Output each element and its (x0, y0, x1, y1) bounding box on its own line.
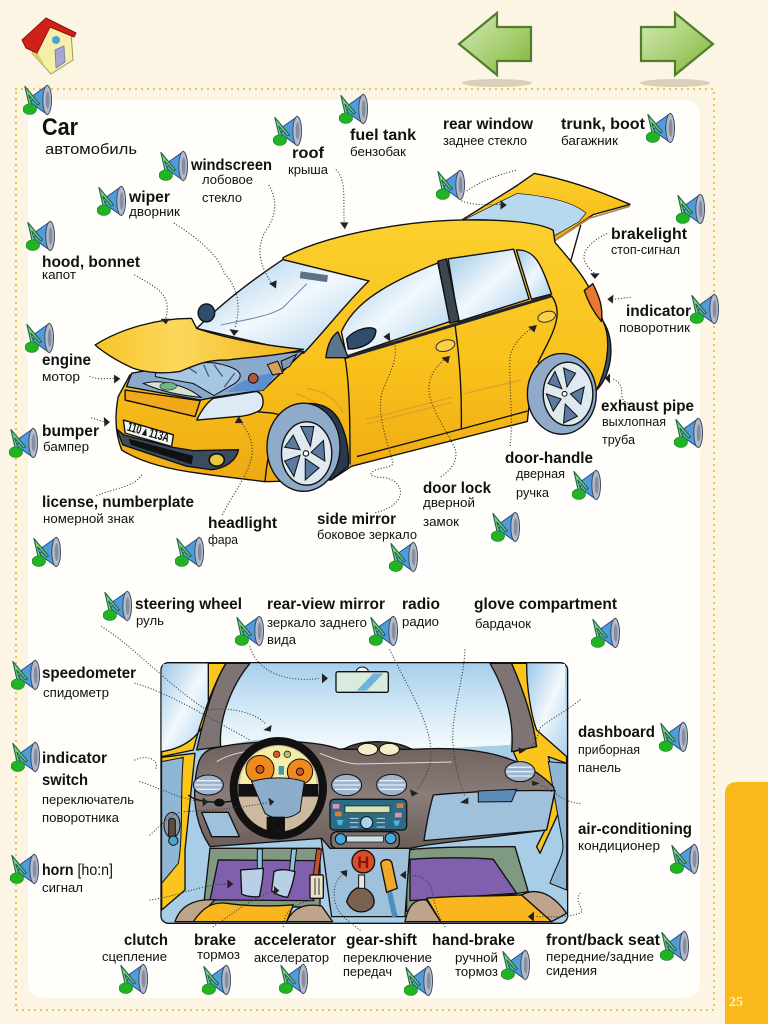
label: indicator switch: переключатель (42, 793, 134, 807)
label: glove compartment: бардачок (475, 617, 532, 631)
label: brake: тормоз (197, 948, 240, 962)
label: gear-shift: gear-shift (346, 932, 418, 949)
seats (175, 892, 567, 922)
label: engine: мотор (42, 370, 80, 384)
label: trunk boot: багажник (561, 134, 619, 148)
small panel (202, 812, 239, 837)
label: wiper: дворник (129, 205, 181, 219)
label: exhaust pipe: труба (602, 433, 635, 447)
dashboard trim line (217, 750, 452, 764)
label: fuel tank: бензобак (350, 145, 407, 159)
car body (116, 220, 608, 482)
instrument binnacle (344, 742, 412, 755)
label: rear window (443, 116, 534, 148)
label: rear-view mirror: зеркало заднего (267, 616, 367, 630)
label: hood bonnet: hood, bonnet (42, 254, 141, 271)
leader: air conditioning (532, 781, 580, 803)
leader: gear shift (334, 870, 360, 930)
leader: indicator (607, 295, 630, 304)
label: indicator: поворотник (619, 321, 691, 335)
leader: brakelight (584, 234, 607, 279)
label: dashboard: dashboard (578, 724, 655, 741)
label: accelerator: accelerator (254, 932, 336, 949)
leader: speedometer (135, 683, 250, 740)
leader: hood (135, 275, 170, 324)
label: license numberplate (42, 494, 194, 526)
label: gear-shift: переключение (343, 951, 432, 965)
label: engine (42, 352, 91, 384)
intake grille (129, 439, 193, 464)
floor left (203, 848, 320, 908)
side door handle (164, 812, 180, 845)
home icon (22, 18, 76, 74)
label: brakelight: стоп-сигнал (611, 243, 680, 257)
label: accelerator (254, 932, 336, 965)
dashboard (195, 742, 555, 848)
windscreen view (220, 663, 511, 750)
label: radio: радио (402, 615, 439, 629)
label: rear-view mirror: rear-view mirror (267, 596, 385, 613)
label: trunk boot (561, 116, 646, 148)
open tailgate (462, 173, 630, 268)
label: hand-brake: тормоз (455, 965, 498, 979)
label: door lock: дверной (423, 496, 475, 510)
tail light (584, 284, 602, 322)
label: door-handle: дверная (516, 467, 565, 481)
leader: wiper (174, 223, 239, 336)
label: air-conditioning (578, 821, 692, 853)
label: bumper: bumper (42, 423, 99, 440)
label: brakelight: brakelight (611, 226, 688, 243)
label: windscreen: windscreen (190, 157, 272, 174)
label: clutch (102, 932, 168, 964)
leader: dashboard (518, 700, 580, 754)
door handles (435, 309, 557, 353)
label: radio: radio (402, 596, 440, 613)
interior frame (161, 663, 568, 923)
left side window (162, 664, 208, 752)
label: speedometer: спидометр (43, 686, 109, 700)
leader: glove compartment (453, 650, 468, 804)
label: fuel tank (350, 127, 416, 159)
label: steering wheel (135, 596, 242, 628)
air vents (193, 762, 535, 796)
label: wiper: wiper (128, 189, 170, 206)
label: rear-view mirror (267, 596, 385, 647)
front wheel (267, 403, 340, 491)
label: roof: крыша (288, 163, 328, 177)
radio unit (330, 799, 407, 830)
footwell carpet right (410, 858, 517, 901)
door seams (345, 296, 557, 464)
label: exhaust pipe: exhaust pipe (601, 398, 694, 415)
right side window (528, 664, 567, 757)
leader: side mirror (371, 333, 400, 513)
leader: front back seat (528, 893, 582, 922)
engine bay (127, 351, 304, 400)
leader: hand brake (400, 871, 445, 927)
rear wheel (527, 354, 596, 434)
door pillar (438, 259, 459, 323)
body crease (366, 380, 520, 424)
fog lamp (209, 454, 224, 466)
label: windscreen (190, 157, 272, 205)
title: Car (42, 114, 78, 141)
front wheel arch (293, 404, 348, 480)
headlight (197, 391, 263, 420)
label: headlight: фара (208, 533, 238, 547)
engine parts (143, 354, 297, 397)
fender crease lines (297, 388, 343, 415)
label: clutch: сцепление (102, 950, 167, 964)
right navigation arrow (640, 13, 713, 87)
label: glove compartment (474, 596, 618, 631)
label: accelerator: акселератор (254, 951, 329, 965)
label: indicator switch (42, 750, 134, 825)
label: engine: engine (42, 352, 91, 369)
label: horn: сигнал (42, 881, 83, 895)
windscreen wipers (209, 271, 328, 351)
rear quarter window (516, 250, 551, 299)
rear side window (448, 249, 529, 322)
leader: horn (150, 798, 274, 835)
label: side mirror: боковое зеркало (317, 528, 417, 542)
leader: radio (390, 650, 431, 797)
label: dashboard: панель (578, 761, 621, 775)
leader: door handle (510, 325, 537, 446)
label: brakelight (611, 226, 688, 257)
leader: exhaust pipe (605, 373, 630, 404)
steering wheel (234, 741, 323, 836)
leader: steering wheel (102, 627, 272, 732)
leader: brake (213, 886, 279, 927)
label: license numberplate: license, numberplate (42, 494, 194, 511)
grille band (125, 390, 200, 417)
page tab with page number: 25 (729, 995, 743, 1010)
label: front back seat: передние/задние (546, 950, 654, 964)
leader: roof (336, 170, 348, 229)
front side window (341, 263, 450, 356)
label: exhaust pipe: выхлопная (602, 415, 666, 429)
label: rear window: заднее стекло (443, 134, 527, 148)
label: horn: horn [ho:n] (42, 862, 113, 879)
interior illustration (102, 627, 582, 930)
leader: bumper (92, 417, 110, 427)
label: indicator switch: switch (42, 772, 88, 789)
leader: windscreen (260, 185, 277, 288)
label: brake (194, 932, 240, 962)
label: door-handle (505, 450, 593, 500)
left navigation arrow (459, 13, 532, 87)
label: door lock: door lock (423, 480, 491, 497)
white content panel (28, 100, 700, 998)
label: side mirror (317, 511, 417, 542)
pedals (241, 849, 323, 898)
bumper seam (257, 412, 282, 482)
indicator stalk (188, 795, 237, 803)
hand brake (381, 860, 397, 917)
CD unit (331, 832, 399, 848)
window seal (345, 296, 551, 358)
label: speedometer: speedometer (42, 665, 136, 682)
label: steering wheel: steering wheel (135, 596, 242, 613)
label: headlight (208, 515, 278, 547)
label: dashboard (578, 724, 655, 775)
centre console (317, 797, 427, 917)
label: fuel tank: fuel tank (350, 127, 416, 144)
label: dashboard: приборная (578, 743, 640, 757)
gear shift (347, 850, 375, 912)
glove compartment (424, 791, 555, 841)
label: radio (402, 596, 440, 629)
label: brake: brake (194, 932, 236, 949)
rear-view mirror (336, 667, 388, 692)
label: windscreen: лобовое (202, 173, 253, 187)
glove latch (478, 789, 517, 802)
leader: accelerator (283, 900, 317, 927)
label: door lock: замок (423, 515, 460, 529)
left mirror (198, 304, 215, 322)
car illustration (90, 170, 630, 514)
label: steering wheel: руль (136, 614, 164, 628)
rear bumper (588, 322, 611, 390)
label: indicator: indicator (626, 303, 691, 320)
open bonnet (95, 318, 304, 373)
label: door-handle: ручка (516, 486, 549, 500)
leader: engine (90, 375, 120, 384)
label: indicator (619, 303, 691, 335)
label: air-conditioning: air-conditioning (578, 821, 692, 838)
label: indicator switch: indicator (42, 750, 107, 767)
label: wiper (128, 189, 181, 219)
number plate: 110▲113A (126, 419, 172, 445)
side mirror (326, 328, 376, 358)
label: roof (288, 145, 328, 177)
title (42, 114, 137, 158)
label: headlight: headlight (208, 515, 278, 532)
title: автомобиль (45, 141, 137, 158)
leader: license plate (97, 475, 142, 495)
label: clutch: clutch (124, 932, 168, 949)
label: hand-brake (432, 932, 515, 979)
label: hand-brake: ручной (455, 951, 498, 965)
label: trunk boot: trunk, boot (561, 116, 646, 133)
label: speedometer (42, 665, 136, 700)
leader: headlight (223, 416, 252, 514)
label: exhaust pipe (601, 398, 694, 447)
leader: rear window (462, 170, 517, 210)
gear shift: H (357, 853, 369, 872)
label: horn (42, 862, 113, 895)
label: rear window: rear window (443, 116, 534, 133)
label: door-handle: door-handle (505, 450, 593, 467)
label: bumper: бампер (43, 440, 89, 454)
label: gear-shift (343, 932, 432, 979)
footwell carpet left (210, 860, 316, 901)
number plate (123, 419, 173, 447)
label: rear-view mirror: вида (267, 633, 296, 647)
label: hand-brake: hand-brake (432, 932, 515, 949)
label: front back seat: сидения (546, 964, 597, 978)
label: air-conditioning: кондиционер (578, 839, 660, 853)
label: glove compartment: glove compartment (474, 596, 618, 613)
windscreen (197, 260, 369, 353)
leader: door lock (429, 356, 456, 477)
lower air intake (117, 429, 238, 470)
label: windscreen: стекло (202, 191, 242, 205)
label: bumper (42, 423, 99, 454)
label: front back seat: front/back seat (546, 932, 661, 949)
leader: rear-view mirror (250, 647, 328, 683)
label: door lock (423, 480, 491, 529)
right pillar (490, 663, 567, 890)
label: license numberplate: номерной знак (43, 512, 135, 526)
page tab with page number (725, 782, 768, 1024)
label: side mirror: side mirror (317, 511, 396, 528)
label: front back seat (546, 932, 661, 978)
label: indicator switch: поворотника (42, 811, 119, 825)
leader: clutch (150, 879, 233, 900)
label: hood bonnet: капот (42, 268, 76, 282)
label: gear-shift: передач (343, 965, 392, 979)
label: hood bonnet (42, 254, 141, 282)
label: roof: roof (292, 145, 325, 162)
floor right (407, 847, 528, 912)
leader: indicator switch (135, 758, 209, 807)
left pillar (162, 663, 250, 910)
